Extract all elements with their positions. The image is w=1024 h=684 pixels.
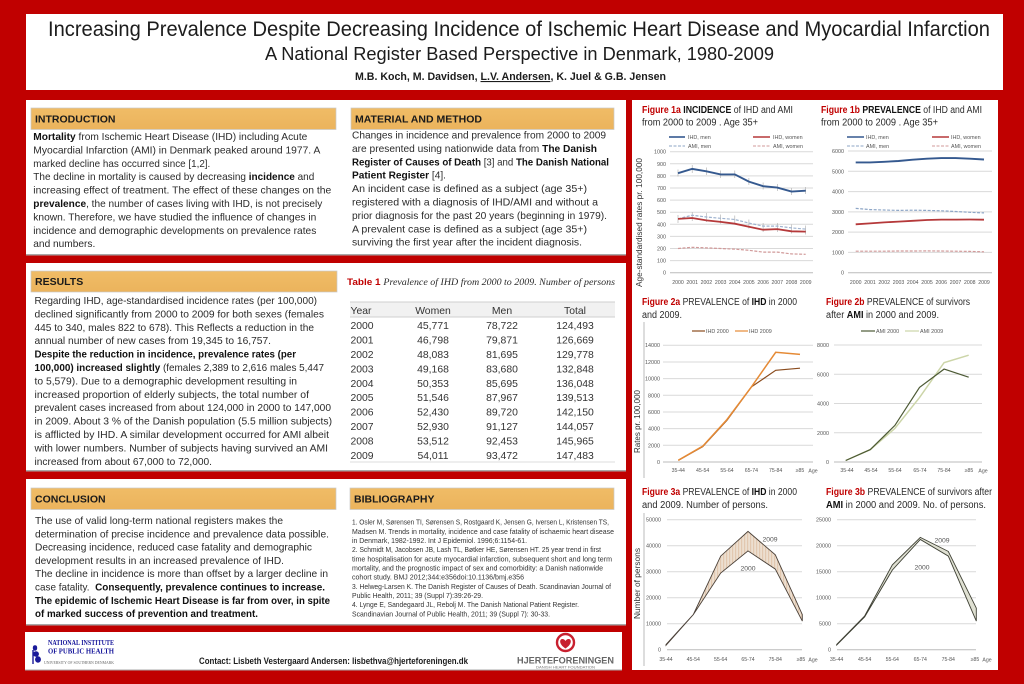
series labels 3a — [740, 536, 778, 572]
y ticks 3b: 25000 — [816, 518, 831, 524]
table 1: 48,083 — [417, 350, 449, 361]
y axis label 3a: Number of persons — [632, 548, 642, 619]
logo: national institute of public health — [33, 639, 115, 665]
table 1: 2003 — [350, 364, 374, 375]
x ticks 1a: 2007 — [772, 280, 783, 286]
line: AMI men 1b — [856, 208, 984, 213]
figure 1a — [634, 105, 813, 287]
x ticks 1a: 2003 — [715, 280, 726, 286]
text: results — [34, 296, 332, 468]
figure 2b — [817, 297, 988, 474]
series labels 3b: 2009 — [934, 538, 950, 544]
legend 1b — [847, 135, 981, 150]
text: results: Regarding IHD, age-standardised incidence rates (per 100,000) — [34, 296, 317, 307]
table 1: 2001 — [350, 335, 374, 346]
text: conclusion: determination of precise incidence and prevalence data possible. — [35, 529, 329, 540]
text: introduction: Mortality from Ischemic Heart Disease (IHD) including Acute — [33, 132, 308, 143]
x ticks 1a: 2006 — [757, 280, 769, 286]
y ticks 1a: 0 — [663, 271, 666, 277]
line: AMI 2009 — [846, 355, 969, 460]
logo: hjerteforeningen: HJERTEFORENINGEN — [517, 656, 614, 666]
table 1: 50,353 — [417, 379, 449, 390]
x ticks 1a: 2005 — [743, 280, 755, 286]
x ticks 3b: 65-74 — [914, 657, 927, 663]
x ticks 1b: 2002 — [878, 280, 890, 286]
heading: bibliography — [350, 488, 614, 510]
text: introduction: increasing effect of treatment. The effect of these changes on the — [33, 186, 332, 197]
figure 1b caption — [821, 105, 982, 128]
line: AMI 2000 — [846, 369, 969, 460]
panel: introduction and method — [26, 100, 626, 256]
table 1: 2008 — [350, 436, 374, 448]
table 1: 46,798 — [417, 335, 449, 346]
x ticks 1b: 2007 — [950, 280, 961, 286]
table 1: 2009 — [350, 451, 374, 462]
text: introduction: known. Therefore, we have studied the influence of changes in — [33, 212, 317, 223]
heading: results — [31, 271, 337, 292]
text: bibliography: Public Health, 2011; 39 (Suppl 7):39:26-29. — [352, 591, 483, 600]
figure 3a caption: Figure 3a PREVALENCE of IHD in 2000 — [642, 487, 797, 498]
x ticks 3a — [659, 657, 818, 664]
x ticks 1a: 2000 — [672, 280, 684, 286]
x ticks 3a: ≥85 — [797, 657, 805, 663]
y ticks 2a: 2000 — [648, 443, 660, 449]
figure 3a caption — [642, 487, 797, 511]
legend 2b: AMI 2000 — [876, 329, 899, 335]
logo: national institute of public health: OF PUBLIC HEALTH — [48, 648, 115, 656]
text: results: declined significantly from 2000 to 2009 for both sexes (females — [34, 309, 324, 320]
figure 3b — [816, 487, 993, 664]
legend 2b — [861, 329, 943, 335]
y ticks 1a: 700 — [657, 186, 666, 192]
y ticks 1a: 800 — [657, 174, 666, 180]
legend 1a: IHD, women — [773, 135, 803, 141]
x ticks 2b: 35-44 — [840, 468, 854, 474]
y ticks 1a: 100 — [657, 259, 666, 265]
table 1: 147,483 — [556, 451, 594, 462]
heading: conclusion — [31, 488, 336, 510]
table 1: 2006 — [350, 408, 374, 419]
table 1: 85,695 — [486, 379, 518, 390]
text: bibliography: 2. Schmidt M, Jacobsen JB, Lash TL, Bøtker HE, Sørensen HT. 25 year trend in first — [352, 545, 601, 554]
heading: conclusion: CONCLUSION — [35, 494, 106, 506]
y ticks 2a: 10000 — [645, 377, 660, 383]
text: introduction: prevalence, the number of cases living with IHD, is not precisely — [33, 199, 323, 210]
x ticks 3a: 75-84 — [769, 657, 782, 663]
x ticks 2a: Age — [808, 468, 818, 474]
y ticks 1a: 500 — [657, 210, 666, 216]
x ticks 1b: 2003 — [893, 280, 904, 286]
legend 1b: IHD, men — [866, 135, 889, 141]
heading: introduction — [31, 108, 336, 130]
y ticks 2a: 12000 — [645, 360, 660, 366]
table 1: 136,048 — [556, 379, 594, 390]
y ticks 3b — [816, 518, 831, 654]
text: results: prevalent cases increased from about 124,000 in 2000 to 147,000 — [34, 403, 331, 414]
x ticks 1b: 2005 — [921, 280, 933, 286]
x ticks 1b: 2000 — [850, 280, 862, 286]
y ticks 2b: 2000 — [817, 431, 829, 437]
text: introduction: The decline in mortality is caused by decreasing incidence and — [33, 172, 315, 183]
table 1: 2002 — [350, 350, 374, 361]
x ticks 2b — [840, 468, 988, 474]
x ticks 1b — [850, 280, 990, 286]
table 1: 2004 — [350, 379, 374, 390]
figure 2a caption: Figure 2a PREVALENCE of IHD in 2000 — [642, 297, 797, 308]
text: introduction: marked decline has occurred since [1,2]. — [33, 159, 210, 170]
text: material and method: registered with a diagnosis of IHD/AMI and without a — [352, 198, 598, 208]
text: introduction: and numbers. — [33, 239, 95, 250]
y ticks 1a: 900 — [657, 162, 666, 168]
x ticks 3b: 75-84 — [942, 657, 955, 663]
text: material and method — [352, 130, 609, 249]
text: conclusion — [35, 516, 330, 620]
text: bibliography: in Denmark, 1982-1992. Int J Epidemiol. 1996;6:1154-61. — [352, 536, 527, 545]
text: bibliography: mortality, and the prognostic impact of sex and comorbidity: a Danish nationwide — [352, 564, 603, 572]
text: bibliography — [352, 518, 614, 618]
table 1: 78,722 — [486, 321, 518, 332]
y ticks 2a — [645, 343, 660, 466]
legend 1b: AMI, women — [951, 144, 981, 150]
y axis label 2a: Rates pr. 100,000 — [632, 390, 642, 453]
y ticks 2a: 0 — [657, 460, 660, 466]
figure 2b caption: Figure 2b PREVALENCE of survivors — [826, 297, 970, 308]
contact line: Contact: Lisbeth Vestergaard Andersen: lisbethva@hjerteforeningen.dk — [199, 656, 469, 666]
logo: hjerteforeningen: DANISH HEART FOUNDATION — [536, 666, 595, 670]
y ticks 2b: 0 — [826, 460, 829, 466]
x ticks 3b: Age — [982, 658, 992, 664]
table 1: 132,848 — [556, 364, 594, 375]
title panel — [26, 14, 1003, 90]
panel: figures — [632, 100, 998, 670]
logo: national institute of public health: UNIVERSITY OF SOUTHERN DENMARK — [44, 660, 115, 665]
table 1: 89,720 — [486, 408, 518, 419]
table 1: 126,669 — [556, 335, 594, 346]
x ticks 1a: 2004 — [729, 280, 741, 286]
text: bibliography: cohort study. BMJ 2012;344:e356doi:10.1136/bmj.e356 — [352, 573, 524, 582]
y ticks 1b: 4000 — [832, 190, 844, 196]
text: bibliography: 4. Lynge E, Sandegaard JL, Rebolj M. The Danish National Patient Register. — [352, 600, 579, 609]
text: results: to 5,579). Due to a demographic development resulting in — [34, 376, 297, 387]
legend 1a — [669, 135, 803, 150]
legend 2a: IHD 2000 — [706, 329, 729, 335]
table 1: 144,057 — [556, 422, 594, 433]
y ticks 3a: 30000 — [646, 570, 661, 576]
figure 2a caption — [642, 297, 797, 321]
panel: footer — [25, 632, 622, 670]
y ticks 1a: 400 — [657, 222, 666, 228]
x ticks 3a: 65-74 — [741, 657, 755, 663]
x ticks 2b: ≥85 — [965, 468, 973, 474]
legend 1a: AMI, women — [773, 144, 803, 150]
x ticks 2a: 55-64 — [720, 468, 734, 474]
table 1: 2000 — [350, 321, 374, 332]
text: results: is afflicted by IHD. A similar development occurred for AMI albeit — [34, 430, 329, 441]
table 1: 2005 — [350, 393, 374, 404]
y ticks 3a: 10000 — [646, 622, 661, 628]
table 1: 49,168 — [417, 364, 449, 375]
text: results: in 2009. About 3 % of the Danish population (5.5 million subjects) — [34, 417, 332, 428]
x ticks 2b: Age — [978, 468, 988, 474]
table 1: 54,011 — [417, 451, 449, 462]
figure 1b caption: Figure 1b PREVALENCE of IHD and AMI — [821, 105, 982, 116]
y ticks 3a: 0 — [658, 648, 661, 654]
text: material and method: A prevalent case is defined as a subject (age 35+) — [352, 224, 587, 235]
x ticks 2a — [672, 468, 818, 474]
figure 1a caption — [642, 105, 793, 128]
logo: hjerteforeningen — [517, 634, 614, 670]
table 1 title: Table 1 Prevalence of IHD from 2000 to 2009. Number of persons — [347, 277, 615, 288]
x ticks 1b: 2008 — [964, 280, 976, 286]
table 1: 92,453 — [486, 436, 518, 448]
x ticks 1a — [672, 280, 812, 286]
line: AMI men 1a — [678, 215, 806, 229]
y ticks 3b: 5000 — [819, 622, 831, 628]
x ticks 1b: 2001 — [864, 280, 876, 286]
authors: M.B. Koch, M. Davidsen, L.V. Andersen, K. Juel & G.B. Jensen — [355, 71, 666, 83]
x ticks 1b: 2009 — [978, 280, 990, 286]
y ticks 3a: 40000 — [646, 544, 661, 550]
table 1: 45,771 — [417, 321, 449, 332]
figure 1b — [821, 105, 992, 286]
y ticks 3b: 20000 — [816, 544, 831, 550]
figure 3b caption: Figure 3b PREVALENCE of survivors after — [826, 487, 993, 498]
y ticks 3b: 10000 — [816, 596, 831, 602]
y axis label 1a: Age-standardised rates pr. 100,000 — [634, 158, 644, 287]
text: material and method: are presented using nationwide data from The Danish — [352, 144, 597, 155]
heading: bibliography: BIBLIOGRAPHY — [354, 494, 435, 506]
figure 2b caption — [826, 297, 970, 321]
legend 2a — [692, 329, 772, 335]
table 1: Total — [564, 306, 586, 317]
x ticks 2a: 35-44 — [672, 468, 685, 474]
panel: conclusion and bibliography — [26, 479, 626, 626]
title: Increasing Prevalence Despite Decreasing Incidence of Ischemic Heart Disease and Myocardial Infarction — [48, 18, 990, 41]
x ticks 3a: Age — [808, 658, 818, 664]
line: IHD women 1a — [678, 218, 806, 232]
text: conclusion: development results in an increased prevalence of IHD. — [35, 556, 284, 567]
line: IHD men 1a — [678, 169, 806, 192]
text: conclusion: case fatality. Consequently, prevalence continues to increase. — [35, 582, 325, 594]
text: introduction: Myocardial Infarction (AMI) in Denmark peaked around 1977. A — [33, 145, 320, 156]
figure 2b caption: after AMI in 2000 and 2009. — [826, 310, 939, 321]
line: IHD men 1b — [856, 158, 984, 162]
table 1: 83,680 — [486, 364, 518, 375]
y ticks 2a: 8000 — [648, 393, 660, 399]
y ticks 3a: 50000 — [646, 518, 661, 524]
table 1: 124,493 — [556, 321, 594, 332]
table 1: 52,430 — [417, 408, 449, 419]
text: results: 100,000) increased slightly (females 2,389 to 2,616 males 5,447 — [34, 363, 324, 374]
text: material and method: surviving the first year after the incident diagnosis. — [352, 238, 582, 249]
legend 1b: AMI, men — [866, 144, 889, 150]
text: introduction — [33, 132, 332, 250]
table 1: 52,930 — [417, 422, 449, 433]
x ticks 1a: 2009 — [800, 280, 812, 286]
table 1: 93,472 — [486, 451, 518, 462]
text: material and method: Register of Causes of Death [3] and The Danish National — [352, 157, 609, 168]
series labels 3b: 2000 — [914, 564, 930, 572]
text: material and method: Changes in incidence and prevalence from 2000 to 2009 — [352, 130, 606, 142]
table 1: 81,695 — [486, 350, 518, 361]
table 1: 87,967 — [486, 393, 518, 404]
table 1: 53,512 — [417, 436, 449, 448]
text: material and method: An incident case is defined as a subject (age 35+) — [352, 184, 587, 195]
x ticks 3b: 45-54 — [858, 657, 871, 663]
line: IHD 2000 — [678, 368, 800, 460]
y ticks 1a: 300 — [657, 234, 666, 240]
band: AMI 2000 to 2009 — [837, 537, 976, 645]
table 1: 142,150 — [556, 408, 594, 419]
x ticks 3b: ≥85 — [971, 657, 979, 663]
x ticks 1b: 2006 — [936, 280, 947, 286]
y ticks 1b: 0 — [841, 271, 844, 277]
text: bibliography: Scandinavian Journal of Public Health, 2011; 39 (Suppl 7): 30-33. — [352, 609, 550, 618]
x ticks 2b: 45-54 — [864, 468, 878, 474]
figure 2a caption: and 2009. — [642, 310, 682, 321]
subtitle: A National Register Based Perspective in Denmark, 1980-2009 — [265, 44, 774, 64]
table 1: 79,871 — [486, 335, 518, 346]
x ticks 2a: 65-74 — [745, 468, 758, 474]
text: bibliography: 1. Osler M, Sørensen TI, Sørensen S, Rostgaard K, Jensen G, Iversen L, Kristensen TS, — [352, 518, 609, 527]
line: IHD women 1b — [856, 220, 984, 224]
x ticks 2b: 65-74 — [913, 468, 927, 474]
x ticks 2a: 75-84 — [769, 468, 782, 474]
series labels 3a: 2000 — [740, 566, 756, 572]
y ticks 1b: 3000 — [832, 210, 844, 216]
text: conclusion: Decreasing incidence, reduced case fatality and demographic — [35, 543, 312, 554]
heading: material and method: MATERIAL AND METHOD — [355, 114, 482, 126]
x ticks 2b: 75-84 — [937, 468, 951, 474]
y ticks 1a: 1000 — [654, 150, 666, 156]
x ticks 3a: 35-44 — [659, 657, 673, 663]
band: IHD 2000 to 2009 — [666, 531, 802, 645]
text: material and method: prior diagnosis for the past 20 years (beginning in 1979). — [352, 211, 607, 222]
series labels 3a: 2009 — [762, 536, 778, 544]
table 1: 91,127 — [486, 422, 518, 433]
text: conclusion: of marked success of prevention and treatment. — [35, 609, 258, 620]
text: conclusion: The decline in incidence is more than offset by a larger decline in — [35, 569, 328, 580]
text: conclusion: The epidemic of Ischemic Heart Disease is far from over, in spite — [35, 596, 330, 607]
table 1: 139,513 — [556, 393, 594, 404]
logo: national institute of public health: NATIONAL INSTITUTE — [48, 639, 114, 647]
x ticks 3a: 45-54 — [687, 657, 700, 663]
x ticks 3b: 35-44 — [830, 657, 843, 663]
figure 1b caption: from 2000 to 2009 . Age 35+ — [821, 118, 938, 128]
y ticks 1a — [654, 150, 666, 277]
x ticks 3b — [830, 657, 992, 664]
text: results: with lower numbers. Number of subjects having survived an AMI — [34, 443, 328, 454]
figure 3a — [632, 487, 818, 666]
text: bibliography: time hospitalisation for acute myocardial infarction, subsequent short and long term — [352, 554, 612, 563]
y ticks 2a: 14000 — [645, 343, 660, 349]
table 1: Women — [415, 306, 451, 317]
figure 3b caption — [826, 487, 993, 511]
text: bibliography: Madsen M. Trends in mortality, incidence and case fatality of ischaemic heart disease — [352, 527, 614, 536]
table 1: Year — [350, 306, 372, 317]
x ticks 2a: ≥85 — [796, 468, 804, 474]
y ticks 2b: 4000 — [817, 402, 829, 408]
error bars 1a — [678, 165, 806, 234]
text: results: increased from about 67,000 to 72,000. — [34, 457, 212, 468]
y ticks 1b: 2000 — [832, 230, 844, 236]
text: conclusion: The use of valid long-term national registers makes the — [35, 516, 283, 527]
y ticks 1a: 200 — [657, 246, 666, 252]
figure 1a caption: from 2000 to 2009 . Age 35+ — [642, 118, 758, 128]
y ticks 1b: 1000 — [832, 250, 844, 256]
legend 2b: AMI 2009 — [920, 329, 943, 335]
table 1: 129,778 — [556, 350, 594, 361]
x ticks 3b: 55-64 — [886, 657, 899, 663]
heading: introduction: INTRODUCTION — [35, 114, 116, 126]
table 1 — [350, 302, 615, 462]
line: AMI women 1a — [678, 247, 806, 254]
y ticks 2a: 4000 — [648, 427, 660, 433]
series labels 3b — [914, 538, 950, 572]
legend 1a: AMI, men — [688, 144, 711, 150]
text: results: Despite the reduction in incidence, prevalence rates (per — [34, 350, 296, 361]
y ticks 1b: 5000 — [832, 169, 844, 175]
text: results: annual number of new cases from 19,345 to 16,757. — [34, 336, 271, 347]
text: introduction: incidence and demographic developments on prevalence rates — [33, 226, 316, 237]
table 1: 145,965 — [556, 436, 594, 448]
heading: results: RESULTS — [35, 276, 83, 288]
y ticks 2b — [817, 343, 829, 466]
y ticks 2b: 8000 — [817, 343, 829, 349]
figure 3a caption: and 2009. Number of persons. — [642, 500, 768, 511]
figure 3b caption: AMI in 2000 and 2009. No. of persons. — [826, 500, 986, 511]
legend 1a: IHD, men — [688, 135, 711, 141]
y ticks 3b: 0 — [828, 648, 831, 654]
x ticks 3a: 55-64 — [714, 657, 727, 663]
y ticks 3b: 15000 — [816, 570, 831, 576]
y ticks 2a: 6000 — [648, 410, 660, 416]
table 1: 51,546 — [417, 393, 449, 404]
text: bibliography: 3. Helweg-Larsen K. The Danish Register of Causes of Death. Scandinavian Journal of — [352, 582, 612, 591]
table 1: 2007 — [350, 422, 374, 433]
figure 2a — [632, 297, 818, 478]
legend 2a: IHD 2009 — [749, 329, 772, 335]
text: results: increased proportion of elderly subjects, the total number of — [34, 390, 309, 401]
heading: material and method — [351, 108, 614, 130]
x ticks 1a: 2002 — [701, 280, 712, 286]
table 1: Men — [492, 306, 512, 317]
y ticks 1b — [832, 149, 844, 277]
figure 1a caption: Figure 1a INCIDENCE of IHD and AMI — [642, 105, 793, 116]
x ticks 2a: 45-54 — [696, 468, 709, 474]
y ticks 1a: 600 — [657, 198, 666, 204]
legend 1b: IHD, women — [951, 135, 981, 141]
y ticks 1b: 6000 — [832, 149, 844, 155]
x ticks 1a: 2001 — [686, 280, 698, 286]
y ticks 3a — [646, 518, 661, 654]
panel: results — [26, 263, 626, 472]
x ticks 2b: 55-64 — [888, 468, 902, 474]
line: IHD 2009 — [678, 352, 800, 460]
text: results: 445 to 340, males 822 to 678). This Reflects a reduction in the — [34, 323, 314, 334]
text: material and method: Patient Register [4]. — [352, 171, 446, 182]
line: AMI women 1b — [856, 250, 984, 253]
x ticks 1a: 2008 — [786, 280, 797, 286]
y ticks 2b: 6000 — [817, 372, 829, 378]
y ticks 3a: 20000 — [646, 596, 661, 602]
x ticks 1b: 2004 — [907, 280, 919, 286]
